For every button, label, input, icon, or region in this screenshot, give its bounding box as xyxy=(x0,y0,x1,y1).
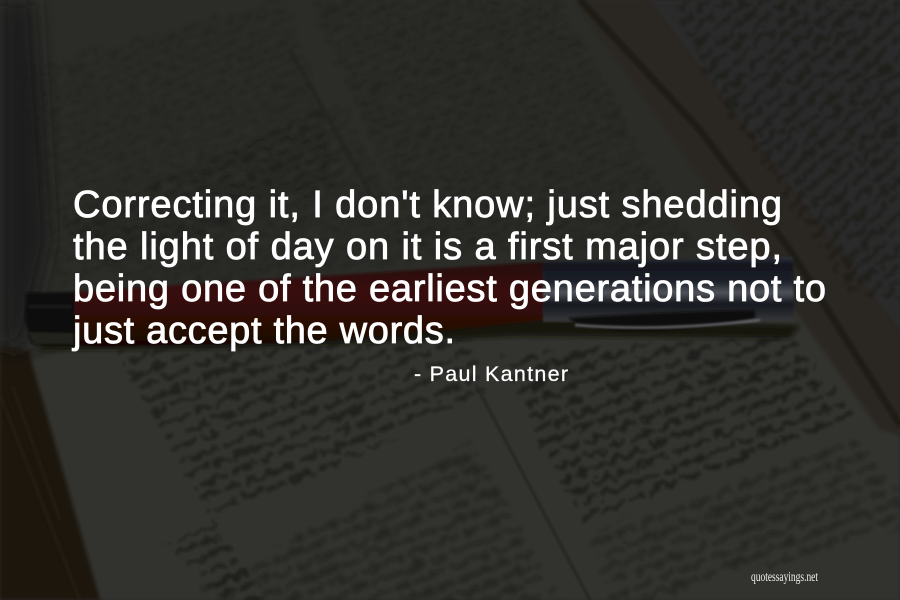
pen clip xyxy=(568,310,755,330)
upper right page xyxy=(650,0,900,330)
printed text: top middle page xyxy=(310,0,700,250)
book gutter dark line xyxy=(580,0,900,425)
quote line 3: being one of the earliest generations not to xyxy=(73,268,826,310)
wood surface lower left xyxy=(0,345,100,600)
printed text: lower left column xyxy=(115,335,485,600)
watermark: quotessayings.net xyxy=(751,570,818,585)
blue metal section xyxy=(543,257,794,322)
printed text: upper right page xyxy=(670,0,900,300)
quote line 4: just accept the words. xyxy=(72,310,455,352)
red barrel xyxy=(74,262,544,346)
lower book page xyxy=(0,300,900,600)
quote line 2: the light of day on it is a first major step, xyxy=(73,226,782,268)
printed text: top left page xyxy=(20,0,345,285)
pen cap end xyxy=(25,292,78,345)
quote line 1: Correcting it, I don't know; just shedding xyxy=(73,184,782,226)
pen shadow xyxy=(40,318,800,350)
brown gutter strip xyxy=(575,0,900,440)
attribution: - Paul Kantner xyxy=(414,362,568,386)
pen xyxy=(25,257,800,350)
column divider xyxy=(476,385,590,600)
printed text: lower right column xyxy=(500,335,860,520)
left margin shadow xyxy=(0,0,50,350)
quote text xyxy=(72,184,826,352)
